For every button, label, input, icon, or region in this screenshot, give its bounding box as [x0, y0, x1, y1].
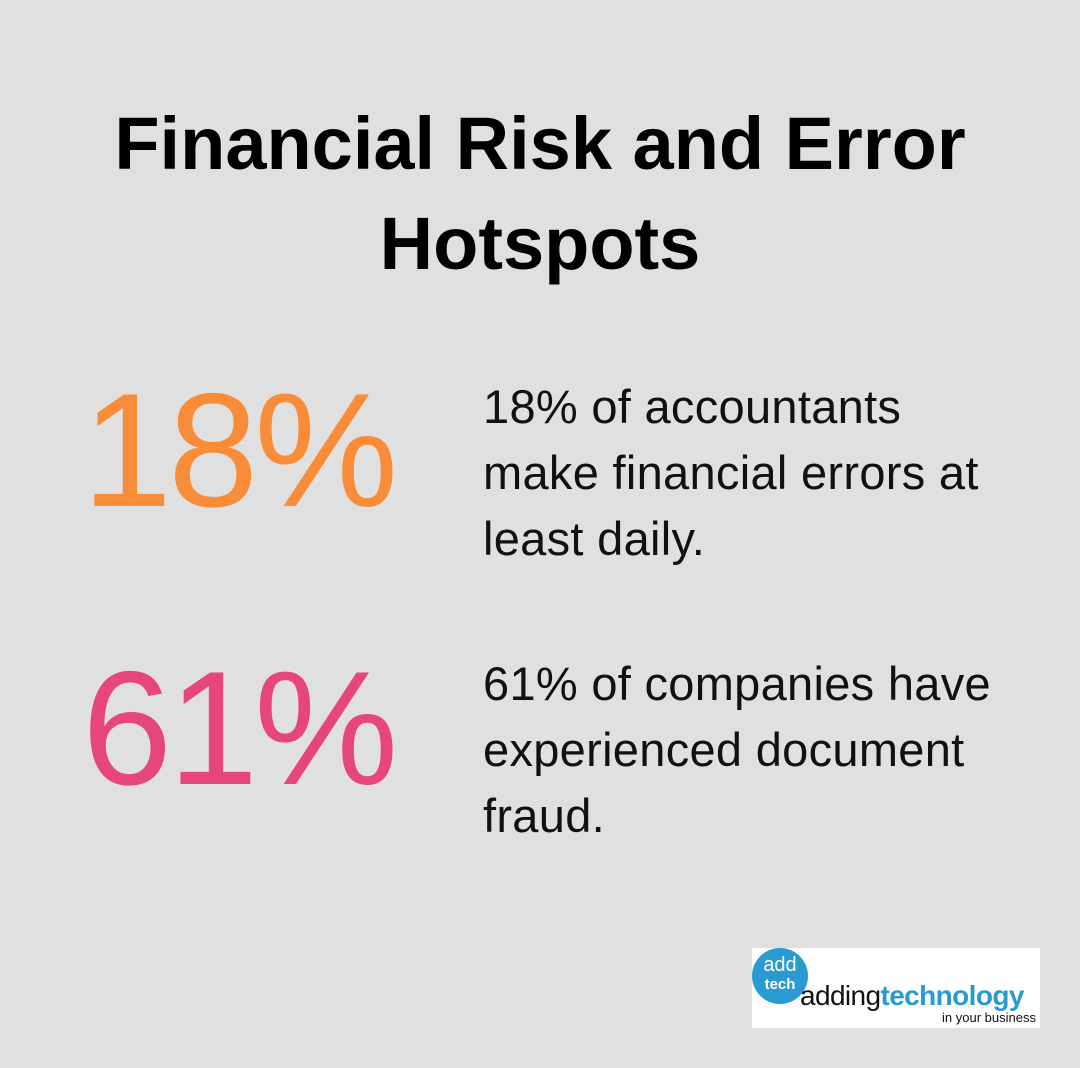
- icon: addtech circle: [752, 948, 808, 1004]
- stat 1 number: 18%: [82, 360, 394, 541]
- stat 1 text: make financial errors at: [483, 446, 979, 499]
- stat 2 number: 61%: [82, 638, 394, 819]
- stat 2 text: 61% of companies have: [483, 657, 991, 710]
- logo wordmark: addingtechnology: [800, 980, 1024, 1011]
- stat 2 text: [483, 657, 991, 842]
- title: [114, 102, 966, 285]
- stat 2 text: fraud.: [483, 789, 605, 842]
- logo: in your business: [942, 1010, 1036, 1025]
- icon: addtech circle: add: [763, 954, 797, 976]
- stat 1 text: least daily.: [483, 512, 705, 565]
- title: Financial Risk and Error: [114, 102, 966, 185]
- logo: [752, 948, 1040, 1028]
- title: Hotspots: [380, 202, 700, 285]
- icon: addtech circle: tech: [765, 976, 795, 993]
- stat 1 text: 18% of accountants: [483, 380, 901, 433]
- stat 2 text: experienced document: [483, 723, 965, 776]
- stat 1 text: [483, 380, 979, 565]
